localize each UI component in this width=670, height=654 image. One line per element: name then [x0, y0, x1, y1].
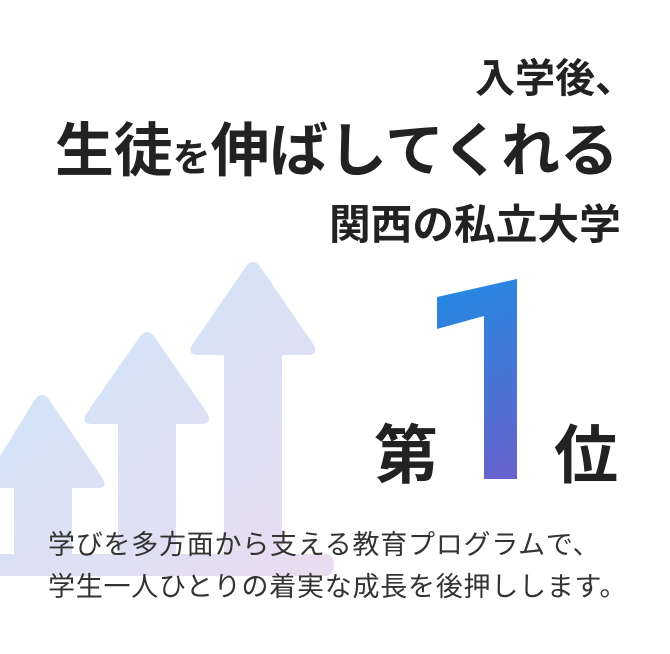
body text: 学びを多方面から支える教育プログラムで、: [48, 530, 600, 560]
numeral 1 with gradient: [437, 279, 517, 479]
character: 位: 位: [554, 420, 618, 492]
heading line 1: 入学後、: [475, 57, 635, 101]
ranking: first place: [374, 279, 618, 492]
heading line 3: 関西の私立大学: [329, 201, 621, 248]
body text: 学生一人ひとりの着実な成長を後押しします。: [48, 572, 627, 602]
body text: [48, 530, 627, 602]
heading line 2: 生徒を伸ばしてくれる: [55, 119, 619, 184]
character: 第: 第: [374, 420, 438, 492]
